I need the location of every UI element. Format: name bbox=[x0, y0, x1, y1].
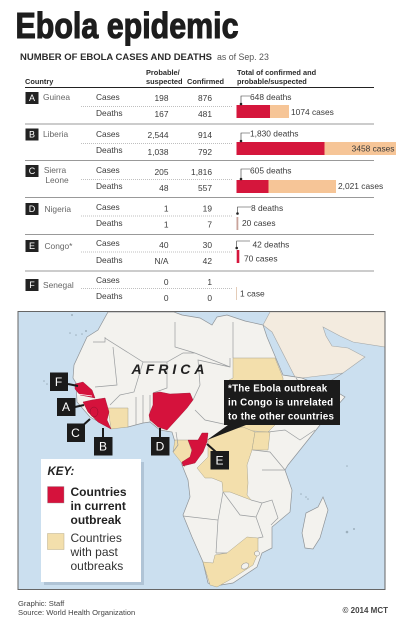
row: Senegal: 1 bbox=[207, 277, 212, 287]
land: Madagascar bbox=[302, 497, 328, 549]
credits: Source: World Health Organization bbox=[18, 608, 135, 617]
row: Sierra Leone: 205 bbox=[155, 167, 169, 177]
land: Middle East bbox=[263, 312, 385, 378]
table column headers: suspected bbox=[146, 77, 183, 86]
row: Senegal: Deaths bbox=[96, 291, 123, 301]
row: Senegal: Cases bbox=[96, 275, 120, 285]
row: Sierra Leone: Leone bbox=[45, 175, 69, 185]
row: Guinea: 876 bbox=[198, 93, 212, 103]
map of Africa bbox=[18, 312, 385, 590]
row: Senegal: 0 bbox=[164, 277, 169, 287]
map letter markers: F bbox=[55, 375, 62, 389]
row: Senegal: 0 bbox=[164, 293, 169, 303]
row: Congo: E bbox=[29, 241, 35, 251]
credits bbox=[18, 599, 135, 617]
table column headers: Country bbox=[25, 77, 54, 86]
table subtitle: NUMBER OF EBOLA CASES AND DEATHS bbox=[20, 52, 212, 62]
row: Congo: 30 bbox=[203, 240, 212, 250]
row: Liberia: 914 bbox=[198, 130, 212, 140]
row: Liberia: Liberia bbox=[43, 129, 68, 139]
table column headers bbox=[25, 68, 317, 86]
current outbreak countries bbox=[75, 382, 208, 466]
row: Sierra Leone: Cases bbox=[96, 165, 120, 175]
table column headers: Total of confirmed and bbox=[237, 68, 317, 77]
map key: KEY: bbox=[48, 466, 75, 478]
callout: Congo note: *The Ebola outbreak bbox=[228, 384, 328, 394]
map key bbox=[41, 459, 144, 585]
row: Senegal: F bbox=[29, 280, 35, 290]
row: Senegal: 0 bbox=[207, 293, 212, 303]
row: Nigeria: D bbox=[29, 204, 36, 214]
row: Guinea: Cases bbox=[96, 92, 120, 102]
callout: Congo note: to the other countries bbox=[228, 412, 334, 422]
interior borders bbox=[93, 322, 343, 553]
Guinea, Sierra Leone, Liberia bbox=[83, 398, 111, 429]
row: Guinea: Guinea bbox=[43, 92, 70, 102]
map key: Countries bbox=[70, 485, 127, 499]
title: Ebola epidemic bbox=[16, 5, 238, 46]
row: Senegal: 1 case bbox=[240, 288, 265, 298]
row: Congo: Congo* bbox=[44, 241, 73, 251]
copyright: © 2014 MCT bbox=[343, 606, 388, 615]
row: Sierra Leone: Deaths bbox=[96, 181, 123, 191]
row: Guinea: A bbox=[29, 93, 35, 103]
row: Congo: 42 deaths bbox=[252, 240, 289, 250]
row: Guinea: Deaths bbox=[96, 108, 123, 118]
map letter markers: E bbox=[215, 454, 224, 468]
row: Sierra Leone: 605 deaths bbox=[250, 166, 291, 176]
table column headers: probable/suspected bbox=[237, 77, 307, 86]
row: Congo: 40 bbox=[159, 240, 169, 250]
row: Guinea: 648 deaths bbox=[250, 92, 291, 102]
row: Sierra Leone: 48 bbox=[159, 183, 169, 193]
row: Guinea: 198 bbox=[155, 93, 169, 103]
islands bbox=[43, 314, 355, 533]
past outbreak countries bbox=[108, 358, 283, 587]
row: Sierra Leone: 557 bbox=[198, 183, 212, 193]
row: Sierra Leone: 2,021 cases bbox=[338, 181, 383, 191]
row: Sierra Leone bbox=[26, 165, 383, 193]
map letter markers: D bbox=[156, 440, 165, 454]
map letter markers: A bbox=[62, 400, 70, 414]
row: Liberia: 792 bbox=[198, 147, 212, 157]
row: Guinea: 167 bbox=[155, 109, 169, 119]
row: Nigeria: 1 bbox=[164, 204, 169, 214]
row: Liberia: 2,544 bbox=[148, 130, 169, 140]
row: Liberia: 3458 cases bbox=[352, 144, 394, 154]
row: Nigeria: Cases bbox=[96, 202, 120, 212]
row: Senegal: Senegal bbox=[43, 280, 74, 290]
row: Liberia: Cases bbox=[96, 129, 120, 139]
Nigeria bbox=[149, 392, 193, 430]
row: Guinea: 481 bbox=[198, 109, 212, 119]
map key: Countries bbox=[70, 531, 122, 545]
row: Nigeria: 19 bbox=[203, 204, 212, 214]
row: Congo bbox=[26, 238, 289, 266]
row: Congo: Deaths bbox=[96, 255, 123, 265]
row: Congo: 42 bbox=[203, 256, 212, 266]
row: Congo: 70 cases bbox=[244, 254, 278, 264]
row: Liberia: 1,830 deaths bbox=[250, 128, 298, 138]
callout: Congo note bbox=[207, 380, 340, 440]
row: Congo: N/A bbox=[155, 256, 169, 266]
map key: outbreaks bbox=[70, 559, 123, 573]
row: Liberia: 1,038 bbox=[148, 147, 169, 157]
row: Liberia bbox=[26, 128, 396, 157]
Senegal bbox=[75, 382, 95, 398]
row: Sierra Leone: C bbox=[29, 166, 36, 176]
map key: outbreak bbox=[70, 513, 122, 527]
row: Nigeria: Deaths bbox=[96, 218, 123, 228]
row: Liberia: Deaths bbox=[96, 145, 123, 155]
table subtitle: as of Sep. 23 bbox=[217, 52, 269, 62]
row: Sierra Leone: 1,816 bbox=[191, 167, 212, 177]
row: Nigeria: 20 cases bbox=[242, 218, 276, 228]
table column headers: Confirmed bbox=[187, 77, 224, 86]
row: Sierra Leone: Sierra bbox=[44, 165, 67, 175]
credits: Graphic: Staff bbox=[18, 599, 65, 608]
row: Liberia: B bbox=[29, 130, 35, 140]
row: Nigeria bbox=[26, 202, 283, 230]
map letter markers: B bbox=[99, 440, 107, 454]
land: Africa bbox=[73, 312, 345, 586]
map key: in current bbox=[70, 499, 126, 513]
Africa label: AFRICA bbox=[130, 361, 204, 377]
row: Guinea: 1074 cases bbox=[291, 107, 334, 117]
Congo bbox=[182, 433, 208, 466]
row: Nigeria: 1 bbox=[164, 220, 169, 230]
callout: Congo note: in Congo is unrelated bbox=[228, 398, 333, 408]
table column headers: Probable/ bbox=[146, 68, 180, 77]
row: Congo: Cases bbox=[96, 238, 120, 248]
map letter markers bbox=[50, 372, 229, 470]
row: Guinea bbox=[26, 92, 334, 119]
row: Nigeria: 7 bbox=[207, 220, 212, 230]
row: Nigeria: Nigeria bbox=[44, 204, 71, 214]
row: Nigeria: 8 deaths bbox=[251, 203, 283, 213]
row: Senegal bbox=[26, 275, 265, 303]
map key: with past bbox=[70, 545, 119, 559]
map letter markers: C bbox=[71, 426, 80, 440]
